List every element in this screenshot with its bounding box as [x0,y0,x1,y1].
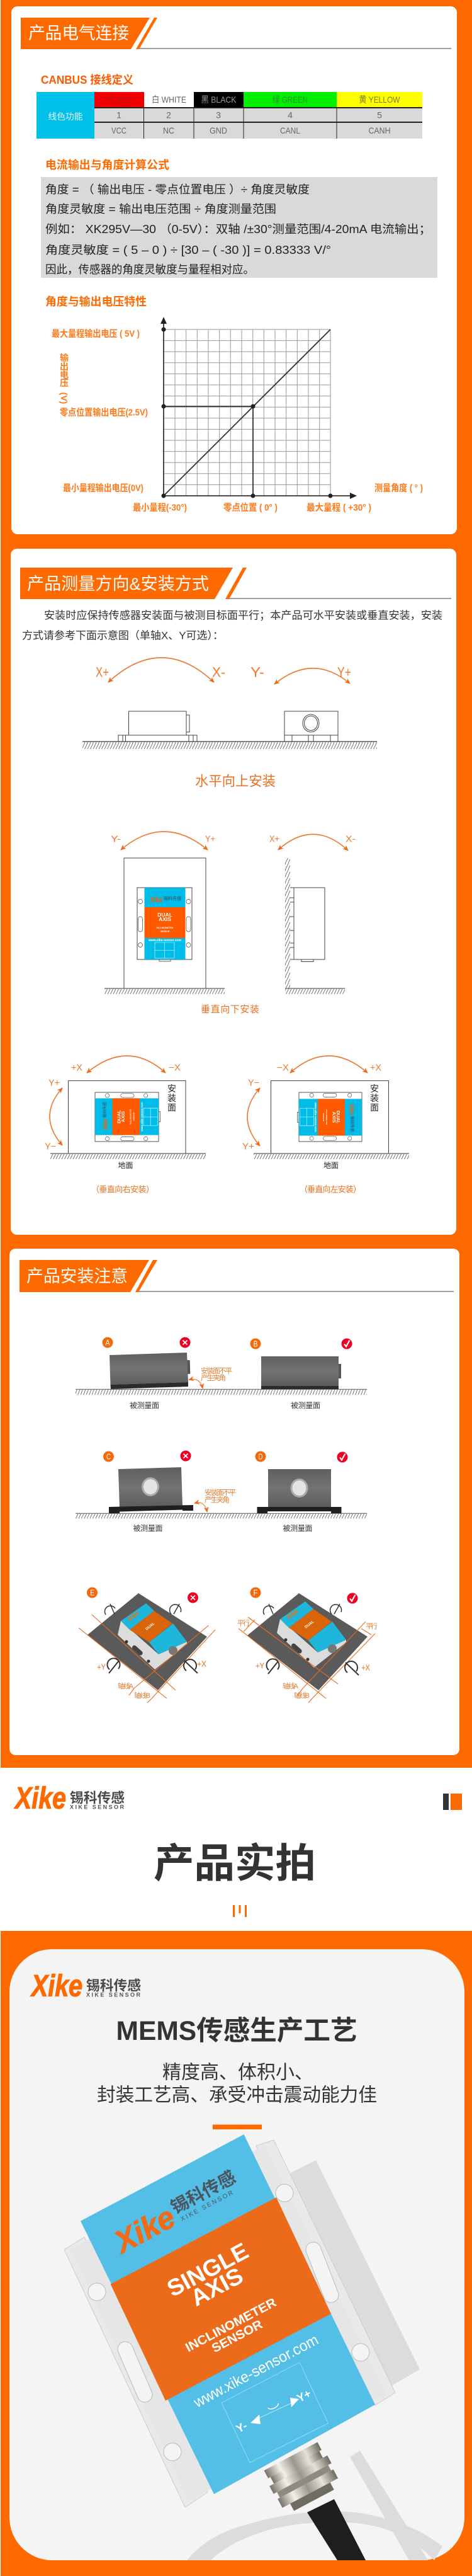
example F: correct alignment: +X [361,1663,370,1672]
chart axis labels: 最小量程输出电压(0V) [63,483,143,494]
table: wire colours and functions: 线色功能 [48,112,83,122]
label text on sensor: Y- [234,2419,249,2436]
diagram: horizontal mounting: Y- [250,664,264,680]
label text on sensor: Y+ [295,2387,313,2405]
example A: wrong: 产生夹角 [201,1373,226,1382]
diagram: vertical left mounting: 地面 [323,1161,339,1170]
diagram: vertical right mounting: 装 [167,1093,176,1103]
subheading: CANBUS wiring: CANBUS 接线定义 [41,73,133,86]
title ornament [233,1905,247,1917]
label text on sensor: SENSOR [210,2317,266,2356]
label text on sensor: SINGLE [163,2238,252,2302]
table: wire colours and functions: 5 [377,110,382,120]
diagram: vertical right mounting: 安 [167,1084,176,1094]
label text on sensor: www.xike-sensor.com [191,2332,322,2412]
mini sensor: rotated right: SENSOR [322,1113,325,1122]
table: wire colours and functions: VCC [111,125,126,135]
heading: 产品测量方向&安装方式: 产品测量方向&安装方式 [27,575,209,593]
mini sensor: vertical: INCLINOMETER [157,927,174,929]
orange divider bar [213,2124,262,2129]
formula box: 角度灵敏度 = ( 5 – 0 ) ÷ [30 – ( -30 )] = 0.83333 V/° [45,244,331,256]
diagram: vertical right mounting: （垂直向右安装） [91,1184,154,1194]
example E: wrong alignment: E [90,1588,94,1598]
formula box [41,177,437,278]
chart axis labels: (V) [59,392,69,404]
description text [97,2063,377,2105]
mini sensor: rotated right [297,1092,362,1142]
label text on sensor: XIKE SENSOR [179,2189,236,2223]
chart axis labels: 零点位置 ( 0° ) [223,501,278,513]
intro paragraph: 安装时应保持传感器安装面与被测目标面平行；本产品可水平安装或垂直安装，安装 [44,610,442,621]
example D: correct [256,1451,347,1533]
device on plate F [277,1601,346,1668]
example F: correct alignment: 平行 [237,1619,250,1627]
caption: horizontal upward: 水平向上安装 [195,774,276,789]
table: wire colours and functions [37,92,422,139]
diagram: horizontal mounting [82,658,377,749]
mini sensor: vertical: 锡科传感 [164,896,181,901]
table: wire colours and functions: CANL [280,125,300,135]
logo on product panel: 锡科传感 [86,1978,141,1993]
diagram: vertical downward mounting: X- [346,834,356,844]
table: wire colours and functions: 红 RED [106,94,132,105]
example E: wrong alignment: +Y [97,1662,106,1672]
example E: wrong alignment: +X [197,1659,206,1668]
caption: vertical downward: 垂直向下安装 [201,1004,259,1015]
heading: 产品安装注意 [20,1260,454,1292]
description text: 精度高、体积小、 [162,2063,313,2083]
brand header: logo [14,1782,125,1816]
chart axis labels: 最小量程(-30°) [133,503,187,513]
brand header: logo: Xike [14,1782,66,1816]
label text on sensor [107,2167,329,2463]
panel: product photo [1,1931,472,2576]
diagram: vertical left mounting: Y− [248,1077,259,1089]
example E: wrong alignment [79,1588,215,1703]
subheading: formula: 电流输出与角度计算公式 [45,158,169,171]
label text on sensor: Xike [107,2199,181,2261]
chart axis labels: 最大量程输出电压 ( 5V ) [52,328,140,339]
example F: correct alignment: F [253,1588,258,1598]
diagram: vertical left mounting: Y+ [242,1142,254,1152]
example C: wrong [103,1450,236,1533]
chart axis labels [52,328,423,513]
example C: wrong: 被测量面 [133,1524,162,1533]
mini sensor: rotated left: Xike [102,1119,110,1131]
label text on sensor: INCLINOMETER [183,2296,279,2355]
mini sensor: rotated right: INCLINOMETER [325,1110,328,1125]
cable [307,2499,366,2560]
mini sensor: rotated left: INCLINOMETER [130,1109,132,1124]
mini sensor: vertical: SENSOR [160,930,170,932]
logo on product panel [30,1969,141,2003]
table: wire colours and functions: 绿 GREEN [273,94,308,105]
diagram: vertical right mounting: Y− [45,1142,56,1152]
intro paragraph: 方式请参考下面示意图（单轴X、Y可选）： [22,630,223,641]
mini sensor: rotated left: SENSOR [133,1112,135,1121]
sensor top face [81,2134,375,2494]
orange page background [1,0,472,1768]
mini sensor: rotated left: 锡科传感 [102,1102,107,1118]
mini sensor: vertical: AXIS [159,916,171,922]
mini sensor: vertical: DUAL [157,912,172,918]
example F: correct alignment: 平行 [366,1622,378,1630]
diagram: vertical downward mounting: Y- [111,834,121,844]
heading: 产品电气连接 [21,18,451,49]
logo on product panel: Xike [30,1969,82,2003]
example F: correct alignment: 轴线B [294,1691,310,1700]
example B: correct: 被测量面 [291,1401,320,1410]
mini sensor: rotated right: www.xike-sensor.com [314,1102,317,1132]
table: wire colours and functions: NC [163,125,174,135]
diagram: vertical right mounting: −X [169,1062,181,1073]
device on plate E [118,1603,187,1669]
device on plate E: DUAL [145,1622,156,1631]
example C: wrong: 安装面不平 [205,1488,236,1497]
diagram: horizontal mounting: X+ [96,664,109,680]
mini sensor: rotated right: AXIS [332,1112,337,1123]
intro paragraph [22,610,442,641]
mini sensor: rotated left: www.xike-sensor.com [140,1102,143,1132]
example E: wrong alignment: 轴线A [118,1681,134,1690]
table: wire colours and functions: 黄 YELLOW [359,94,400,105]
diagram: vertical downward mounting: X+ [269,834,279,844]
cable gland [262,2441,343,2516]
brand header: logo: 锡科传感 [70,1790,125,1806]
example E: wrong alignment: 轴线B [134,1691,150,1700]
device on plate F: DUAL [305,1620,315,1629]
mini sensor: rotated left: DUAL [116,1110,122,1123]
mini sensor: rotated right: 锡科传感 [350,1116,355,1132]
table: wire colours and functions: CANH [369,125,390,135]
ground lines A B [76,1389,367,1518]
table: wire colours and functions: GND [210,125,227,135]
title: 产品实拍: 产品实拍 [154,1841,316,1886]
chart axis labels: 输 [60,353,69,363]
table: wire colours and functions: 黑 BLACK [201,94,237,105]
product photo: sensor [64,2134,442,2560]
brand header: corner mark [443,1794,462,1810]
formula box: 角度 = （ 输出电压 - 零点位置电压 ）÷ 角度灵敏度 [45,183,310,196]
heading: 产品测量方向&安装方式 [20,568,451,599]
example B: correct: B [253,1339,258,1348]
mini sensor: vertical: www.xike-sensor.com [148,939,182,942]
table: wire colours and functions: 3 [216,110,221,120]
diagram: horizontal mounting: Y+ [337,664,351,680]
label text on sensor: 锡科传感 [167,2167,239,2218]
chart axis labels: 出 [60,362,69,372]
logo on product panel: XIKE SENSOR [86,1992,141,1998]
diagram: vertical downward mounting [104,832,356,994]
subheading: angle vs output voltage: 角度与输出电压特性 [45,295,147,308]
mini sensor: rotated right: DUAL [335,1111,341,1124]
diagram: vertical left mounting: 面 [370,1102,379,1113]
example F: correct alignment: +Y [256,1661,264,1671]
mini sensor: vertical [137,888,192,961]
chart axis labels: 最大量程 ( +30° ) [306,501,371,513]
mini sensor: rotated left: AXIS [120,1111,126,1122]
example A: wrong: 安装面不平 [201,1366,232,1375]
heading: MEMS process: MEMS传感生产工艺 [116,2016,357,2046]
panel: electrical connection [11,6,457,534]
chart axis labels: 测量角度 ( ° ) [374,483,423,494]
mini sensor: rotated right: Xike [347,1103,355,1115]
example C: wrong: 产生夹角 [205,1496,230,1504]
diagram: vertical right mounting: Y+ [48,1077,60,1089]
panel: mounting notes [9,1249,459,1755]
diagram: vertical left mounting: +X [370,1062,381,1073]
example D: correct: D [258,1451,263,1462]
formula box: 角度灵敏度 = 输出电压范围 ÷ 角度测量范围 [45,203,276,215]
example F: correct alignment [237,1588,378,1703]
diagram: vertical left mounting [242,1056,409,1194]
example F: correct alignment: 轴线A [283,1681,299,1690]
chart axis labels: 电 [60,370,69,380]
table: wire colours and functions: 白 WHITE [152,94,186,105]
example C: wrong: C [106,1451,111,1462]
panel: measuring direction and mounting [11,549,456,1235]
diagram: vertical downward mounting: Y+ [205,834,215,844]
diagram: vertical right mounting: +X [71,1062,82,1073]
mini sensor: rotated left [95,1092,160,1142]
diagram: vertical left mounting: −X [277,1062,289,1073]
brand header: logo: XIKE SENSOR [70,1804,125,1811]
label text on sensor: AXIS [186,2262,247,2311]
diagram: vertical left mounting: 装 [370,1093,379,1103]
table: wire colours and functions: 2 [166,110,171,120]
chart: angle vs voltage [52,317,423,513]
example D: correct: 被测量面 [283,1524,312,1533]
formula box: 因此，传感器的角度灵敏度与量程相对应。 [45,263,254,276]
formula box: 例如： XK295V—30 （0-5V）：双轴 /±30°测量范围/4-20mA 电流输出； [45,223,431,236]
diagram: vertical left mounting: （垂直向左安装） [300,1184,361,1194]
description text: 封装工艺高、承受冲击震动能力佳 [97,2085,377,2105]
example B: correct [250,1338,352,1410]
heading: 产品安装注意: 产品安装注意 [26,1267,128,1286]
device on plate E: Xike [126,1610,141,1623]
heading: 产品电气连接: 产品电气连接 [28,24,129,43]
example A: wrong: A [106,1338,110,1347]
chart axis labels: 零点位置输出电压(2.5V) [60,407,148,418]
table: wire colours and functions: 1 [116,110,121,120]
diagram: vertical left mounting: 安 [370,1084,379,1094]
diagram: vertical right mounting: 地面 [118,1161,133,1170]
diagram: vertical right mounting [45,1056,206,1194]
chart axis labels: 压 [60,378,69,388]
example A: wrong [102,1337,232,1410]
diagram: horizontal mounting: X- [212,664,225,680]
mini sensor: vertical: Xike [149,895,162,904]
diagram: vertical right mounting: 面 [167,1102,176,1113]
device on plate F: Xike [285,1608,300,1622]
table: wire colours and functions: 4 [288,110,293,120]
example A: wrong: 被测量面 [130,1401,159,1410]
